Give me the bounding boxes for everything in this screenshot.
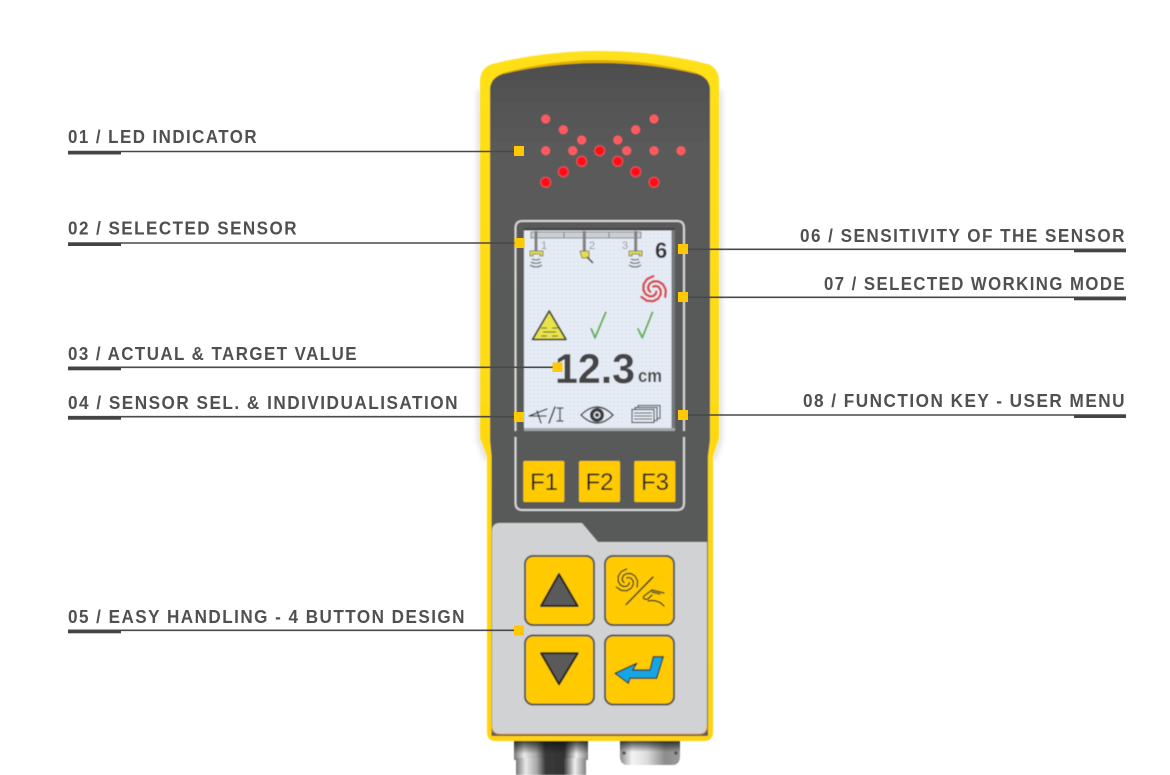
icon: sensor bar: 2 bbox=[589, 240, 595, 252]
callout 04: sensor selection and individualisation: 04 / SENSOR SEL. & INDIVIDUALISATION bbox=[68, 392, 459, 413]
function key F2 bbox=[579, 461, 620, 502]
button: mode switch bbox=[605, 556, 674, 625]
callout 01: LED indicator bbox=[68, 126, 524, 156]
callout 06: sensitivity of the sensor bbox=[678, 225, 1126, 254]
LED indicator bbox=[541, 114, 686, 187]
function key F3: F3 bbox=[641, 469, 669, 496]
callout 02: selected sensor: 02 / SELECTED SENSOR bbox=[68, 218, 298, 238]
button: up bbox=[525, 556, 594, 625]
bezel: display outline bbox=[516, 221, 684, 431]
bezel: function key outline bbox=[516, 437, 684, 510]
callout 07: selected working mode: 07 / SELECTED WORKING MODE bbox=[824, 273, 1126, 294]
function key F1 bbox=[523, 461, 564, 502]
callout 05: four button design: 05 / EASY HANDLING - 4 BUTTON DESIGN bbox=[68, 606, 466, 627]
icon: check mark one bbox=[591, 312, 606, 338]
unit: cm bbox=[638, 366, 662, 386]
housing: yellow frame bbox=[480, 51, 719, 741]
icon: sensor bar bbox=[530, 231, 642, 267]
function key F2: F2 bbox=[585, 469, 614, 496]
panel: dark face bbox=[490, 63, 710, 736]
display screen bbox=[524, 228, 675, 431]
callout 04: sensor selection and individualisation bbox=[68, 392, 524, 422]
callout 01: LED indicator: 01 / LED INDICATOR bbox=[68, 126, 258, 147]
callout 08: function key user menu bbox=[678, 390, 1126, 420]
function key F1: F1 bbox=[530, 469, 558, 496]
callout 05: four button design bbox=[68, 606, 524, 636]
icon: angle and height selection bbox=[529, 407, 563, 423]
connector: left plug bbox=[514, 736, 588, 775]
icon: sensor bar: 3 bbox=[622, 240, 628, 252]
callout 03: actual and target value bbox=[68, 343, 562, 372]
icon: working mode swirl bbox=[640, 274, 669, 302]
icon: check mark two bbox=[638, 312, 653, 338]
actual value reading: 12.3 bbox=[555, 345, 635, 392]
icon: sensor bar: 1 bbox=[541, 240, 547, 252]
sensitivity value: 6 bbox=[655, 238, 667, 263]
device: control unit bbox=[477, 51, 722, 775]
icon: warning triangle bbox=[532, 311, 566, 340]
icon: menu cards bbox=[632, 406, 660, 422]
icon: eye bbox=[581, 407, 613, 423]
button: down bbox=[525, 636, 594, 704]
callout 08: function key user menu: 08 / FUNCTION KEY - USER MENU bbox=[803, 390, 1126, 411]
callout 02: selected sensor bbox=[68, 218, 524, 248]
callout 03: actual and target value: 03 / ACTUAL & TARGET VALUE bbox=[68, 343, 358, 364]
button: enter bbox=[605, 636, 674, 704]
function key F3 bbox=[634, 461, 675, 502]
callout 07: selected working mode bbox=[678, 273, 1126, 302]
callout 06: sensitivity of the sensor: 06 / SENSITIVITY OF THE SENSOR bbox=[800, 225, 1126, 246]
panel: grey keypad area bbox=[492, 523, 707, 734]
connector: right plug bbox=[620, 738, 680, 765]
